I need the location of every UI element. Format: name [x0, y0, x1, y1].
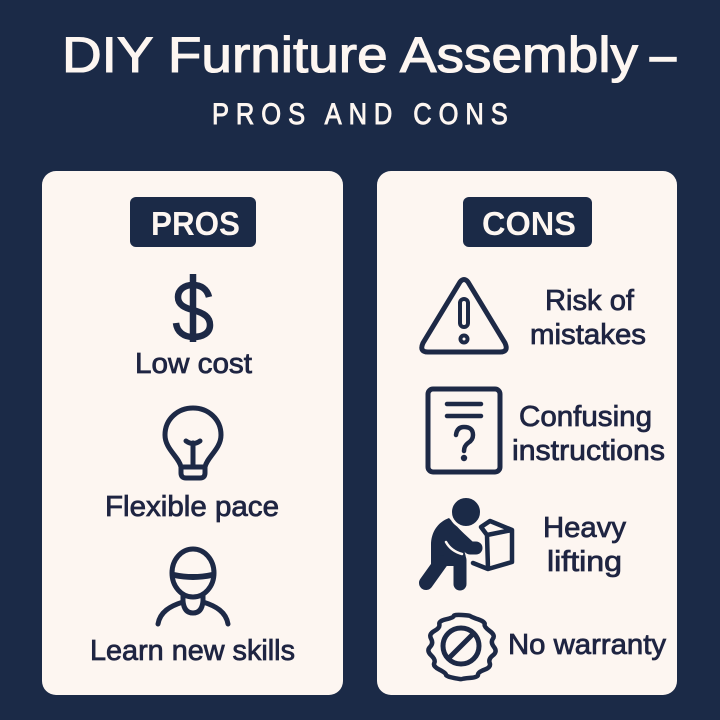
- icon: light bulb: [165, 408, 221, 478]
- label: heavy lifting: lifting: [547, 546, 622, 578]
- pros heading badge: PROS: [151, 205, 240, 242]
- label: risk of mistakes: mistakes: [530, 319, 646, 351]
- label: learn new skills: Learn new skills: [90, 635, 295, 667]
- label: flexible pace: Flexible pace: [105, 491, 279, 523]
- cons heading badge: CONS: [482, 205, 576, 242]
- icon: warning triangle: [422, 280, 506, 352]
- icon: person with cap: [158, 549, 228, 624]
- title: –: [650, 27, 676, 83]
- cons card background: [377, 171, 677, 695]
- label: no warranty: No warranty: [508, 629, 667, 661]
- icon: void warranty seal: [428, 615, 496, 679]
- icon: confusing document: [428, 389, 500, 472]
- label: confusing instructions: Confusing: [519, 401, 652, 433]
- icon: person lifting box: [426, 496, 512, 584]
- label: low cost: Low cost: [135, 348, 252, 380]
- label: confusing instructions: instructions: [512, 435, 665, 467]
- panel: pros: [42, 171, 343, 695]
- label: risk of mistakes: Risk of: [545, 285, 635, 317]
- label: confusing instructions: [512, 401, 665, 467]
- title: DIY Furniture Assembly: [62, 27, 638, 83]
- panel: cons: [377, 171, 677, 695]
- cons heading badge: [463, 197, 592, 247]
- label: heavy lifting: Heavy: [543, 512, 627, 544]
- label: risk of mistakes: [530, 285, 646, 351]
- pros heading badge: [130, 197, 256, 247]
- label: heavy lifting: [543, 512, 627, 578]
- icon: dollar sign: [176, 274, 210, 342]
- pros card background: [42, 171, 343, 695]
- subtitle: PROS AND CONS: [212, 97, 508, 130]
